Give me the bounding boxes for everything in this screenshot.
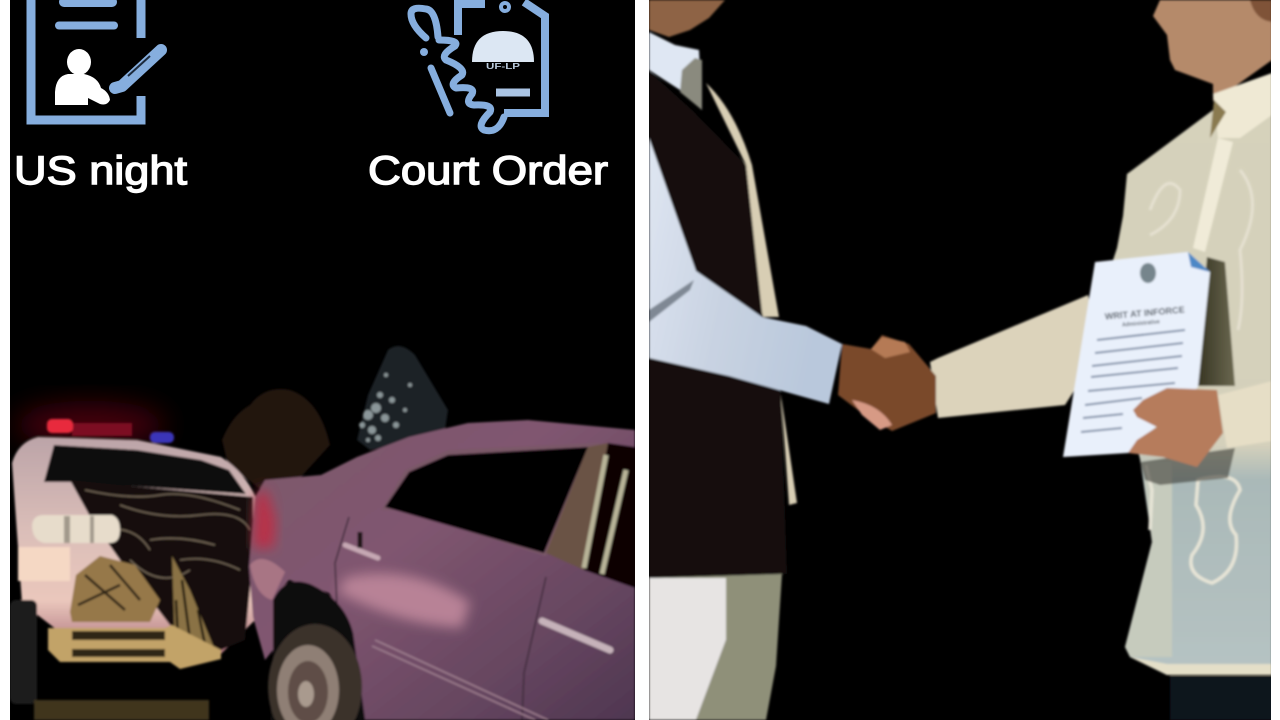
stamp lettering: UF-LP (486, 62, 521, 71)
trees in background (222, 346, 448, 490)
photo: night crash scene with police car (10, 346, 635, 720)
label: US night: US night (14, 149, 187, 193)
left man (649, 0, 842, 720)
icon: court order document with gavel (411, 2, 545, 131)
panel: left black panel (10, 0, 635, 720)
document subtitle: Administrative (1122, 319, 1161, 329)
photo: handshake with document (649, 0, 1272, 720)
police light bar (15, 405, 174, 445)
ground (34, 700, 209, 720)
document title: WRIT AT INFORCE (1104, 305, 1185, 321)
embroidery (1146, 465, 1240, 583)
police car (10, 437, 256, 704)
document in hand (1063, 252, 1235, 457)
right man (930, 0, 1272, 720)
purple sedan (249, 420, 635, 720)
hand holding document (1128, 388, 1223, 467)
label: Court Order: Court Order (368, 149, 608, 193)
handshake (838, 335, 936, 431)
panel: right black panel (649, 0, 1271, 720)
icon: clipboard with person signing (31, 0, 161, 120)
